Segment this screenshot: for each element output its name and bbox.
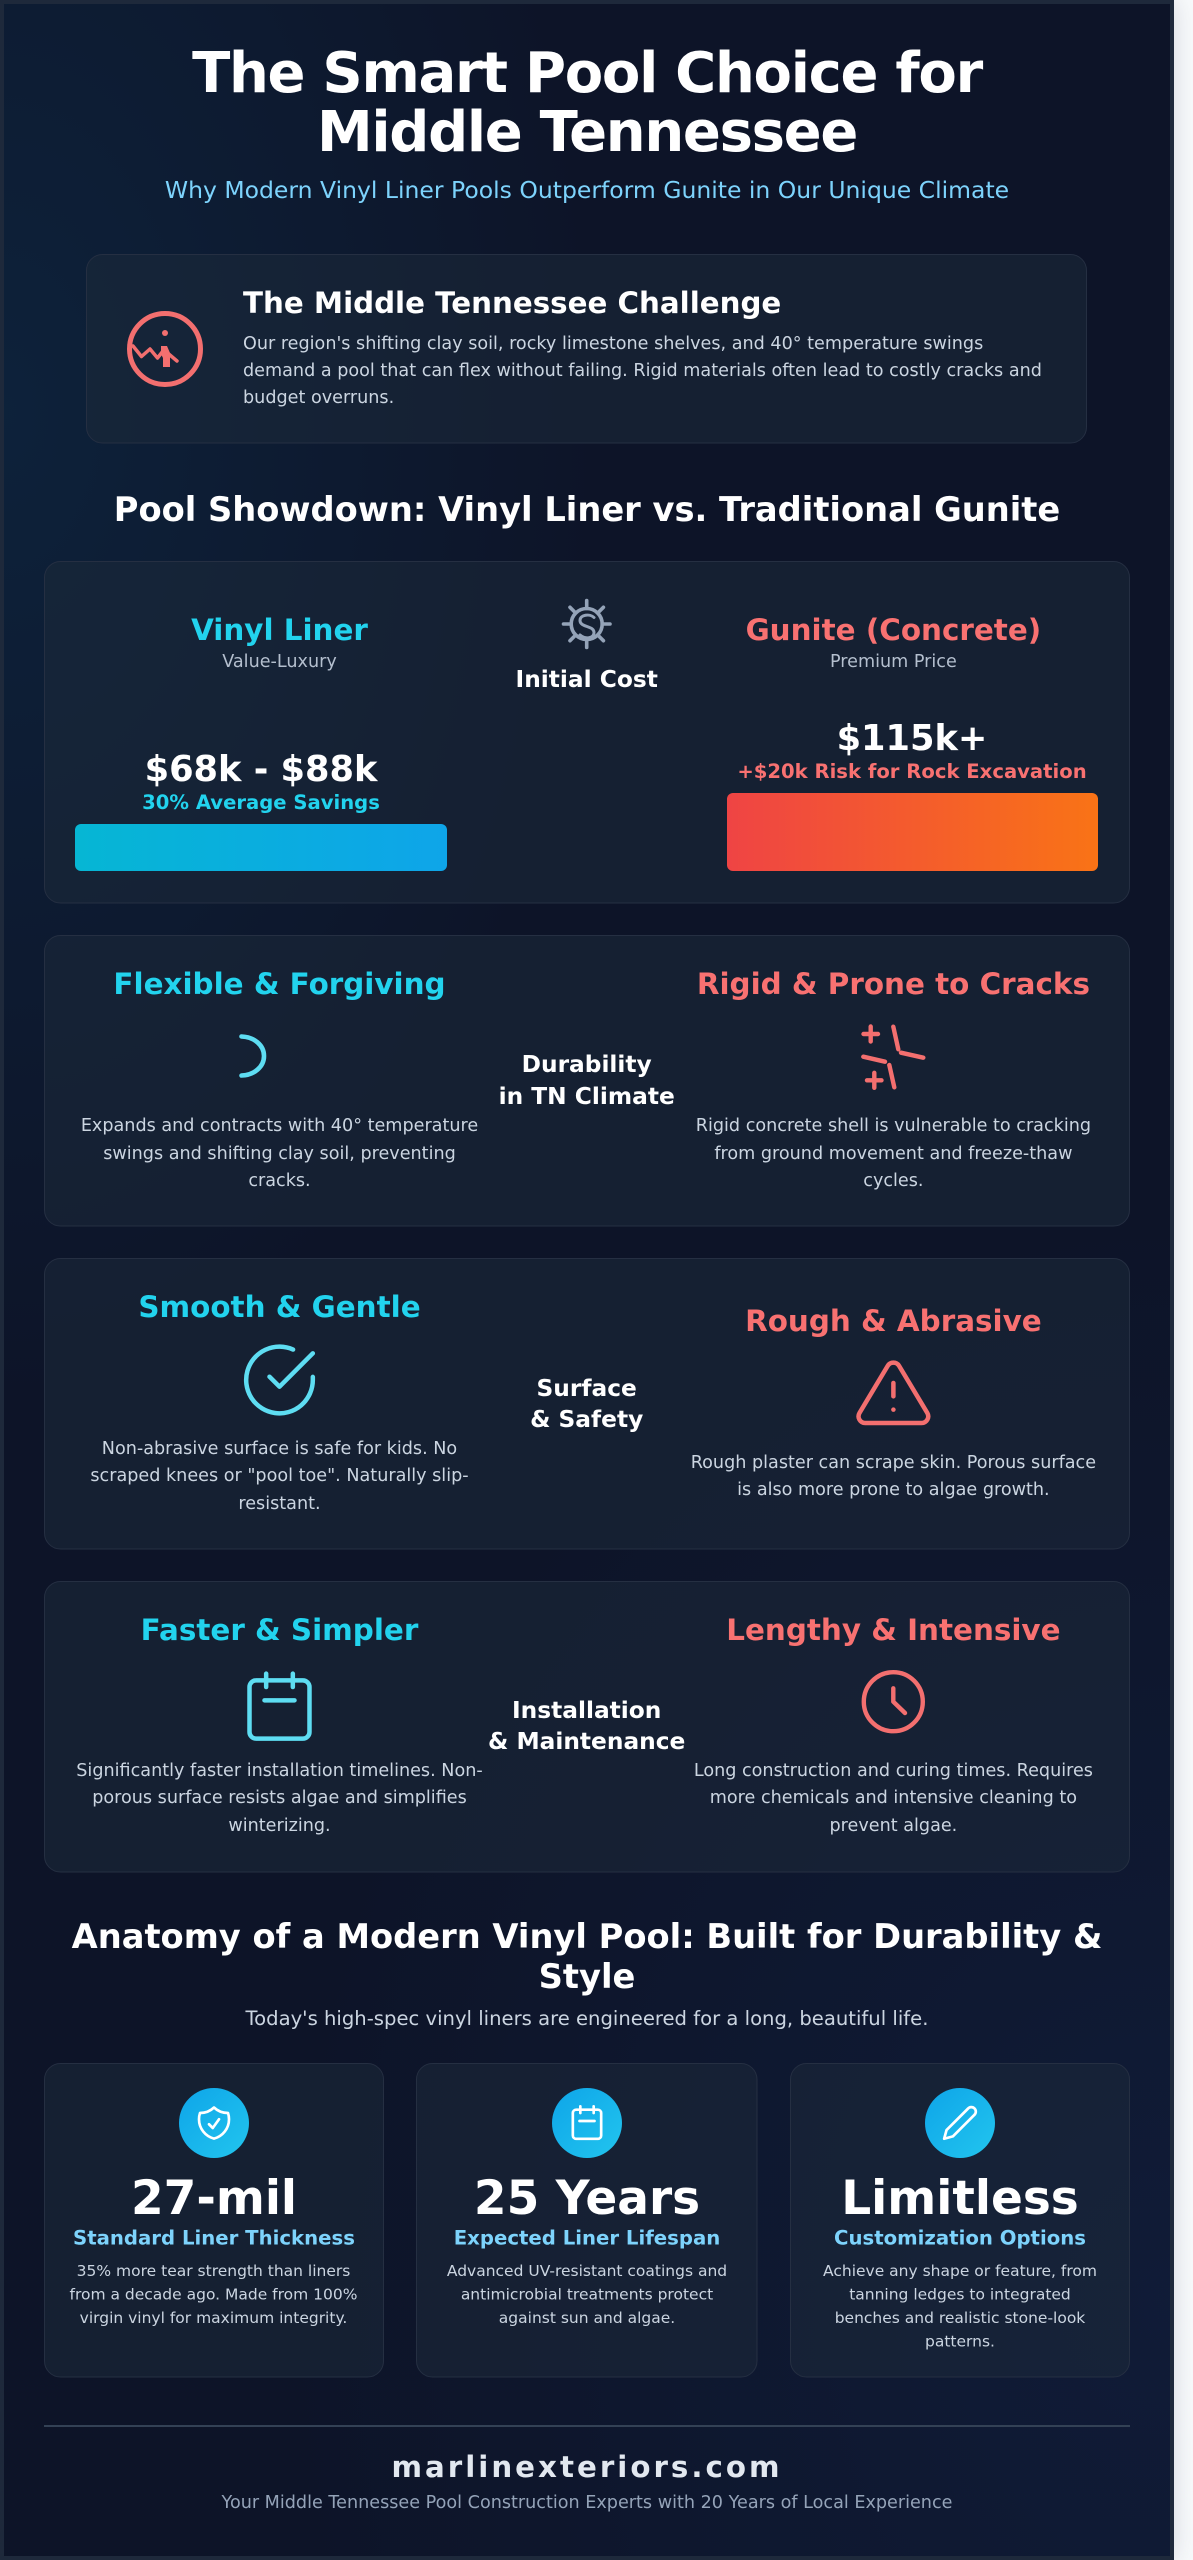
icon: calendar <box>249 1674 309 1739</box>
gunite: rigid and prone to cracks <box>696 967 1091 1191</box>
vinyl durability text: Expands and contracts with 40° temperature <box>81 1116 478 1136</box>
body text: Our region's shifting clay soil, rocky limestone shelves, and 40° temperature swings <box>243 334 983 354</box>
heading: anatomy of a modern vinyl pool <box>72 1917 1102 1996</box>
vinyl surface text: resistant. <box>238 1494 321 1514</box>
panel: the middle tennessee challenge <box>86 254 1086 443</box>
heading: The Middle Tennessee Challenge <box>243 286 781 320</box>
vinyl surface text <box>90 1439 469 1514</box>
center label: surface and safety: Surface <box>537 1375 637 1402</box>
vinyl: flexible and forgiving: Flexible & Forgiving <box>113 967 446 1001</box>
icon: shield <box>179 2088 249 2158</box>
vinyl installation text: porous surface resists algae and simplifies <box>92 1788 467 1808</box>
icon: cracks <box>863 1026 923 1088</box>
stat: 27-mil <box>131 2171 297 2226</box>
stat label: Customization Options <box>834 2226 1086 2250</box>
body text: demand a pool that can flex without failing. Rigid materials often lead to costly cracks and <box>243 361 1042 381</box>
vinyl installation text: Significantly faster installation timelines. Non- <box>76 1761 483 1781</box>
description <box>69 2262 358 2327</box>
gunite durability text: Rigid concrete shell is vulnerable to cracking <box>696 1116 1091 1136</box>
gunite price <box>737 718 1087 783</box>
title: The Smart Pool Choice for <box>192 41 984 106</box>
icon: pencil <box>925 2088 995 2158</box>
vinyl surface text: Non-abrasive surface is safe for kids. No <box>102 1439 457 1459</box>
stat: 25 Years <box>474 2171 700 2226</box>
gunite installation text: more chemicals and intensive cleaning to <box>710 1788 1077 1808</box>
bar: vinyl cost <box>75 824 447 871</box>
icon: check circle <box>246 1347 313 1413</box>
center label: installation and maintenance <box>488 1697 685 1755</box>
center label: installation and maintenance: Installation <box>512 1697 661 1724</box>
gunite: rough and abrasive <box>691 1304 1096 1500</box>
vinyl: faster and simpler <box>76 1613 483 1836</box>
gunite header: Gunite (Concrete) <box>746 613 1041 647</box>
vinyl installation text <box>76 1761 483 1836</box>
gunite durability text: cycles. <box>863 1171 924 1191</box>
vinyl liner header: Vinyl Liner <box>191 613 368 647</box>
gunite durability text: from ground movement and freeze-thaw <box>714 1144 1072 1164</box>
center label: durability: Durability <box>522 1051 652 1078</box>
vinyl price: $68k - $88k <box>145 749 379 790</box>
subtitle: Why Modern Vinyl Liner Pools Outperform Gunite in Our Unique Climate <box>165 176 1009 204</box>
vinyl durability text: swings and shifting clay soil, preventing <box>103 1144 456 1164</box>
gunite header <box>746 613 1041 672</box>
heading: anatomy of a modern vinyl pool: Style <box>539 1957 635 1996</box>
description: Achieve any shape or feature, from <box>823 2262 1097 2280</box>
description: benches and realistic stone-look <box>835 2309 1085 2327</box>
panel: durability comparison <box>44 936 1130 1226</box>
body text: budget overruns. <box>243 388 394 408</box>
gunite: rigid and prone to cracks: Rigid & Prone to Cracks <box>697 967 1090 1001</box>
gunite: rough and abrasive: Rough & Abrasive <box>745 1304 1042 1338</box>
center label: durability <box>499 1051 675 1110</box>
vinyl price <box>142 749 380 814</box>
description: tanning ledges to integrated <box>849 2286 1071 2304</box>
stat label: Standard Liner Thickness <box>73 2226 355 2250</box>
icon: clock <box>864 1672 923 1731</box>
gunite header: Premium Price <box>830 652 957 672</box>
card: liner thickness <box>44 2064 384 2377</box>
stat: Limitless <box>841 2171 1079 2226</box>
vinyl surface text: scraped knees or "pool toe". Naturally slip- <box>90 1466 469 1486</box>
description: patterns. <box>925 2332 995 2350</box>
description: virgin vinyl for maximum integrity. <box>80 2309 347 2327</box>
gunite installation text <box>694 1761 1093 1836</box>
footer: Your Middle Tennessee Pool Construction Experts with 20 Years of Local Experience <box>221 2493 952 2513</box>
vinyl: flexible and forgiving <box>81 967 478 1191</box>
bar: gunite cost <box>727 793 1098 871</box>
title: Middle Tennessee <box>317 100 857 165</box>
body text <box>243 334 1042 408</box>
stat label: Expected Liner Lifespan <box>454 2226 720 2250</box>
vinyl price: 30% Average Savings <box>142 791 380 814</box>
footer <box>221 2450 952 2513</box>
center label: surface and safety: & Safety <box>530 1406 643 1433</box>
icon: dollar wheel <box>564 600 610 648</box>
card: liner lifespan <box>416 2064 757 2377</box>
description <box>823 2262 1097 2350</box>
center label: surface and safety <box>530 1375 643 1433</box>
description <box>447 2262 727 2327</box>
footer: marlinexteriors.com <box>392 2450 782 2484</box>
gunite: lengthy and intensive: Lengthy & Intensive <box>726 1613 1061 1647</box>
vinyl durability text <box>81 1116 478 1191</box>
vinyl: faster and simpler: Faster & Simpler <box>141 1613 419 1647</box>
panel: surface and safety comparison <box>44 1258 1130 1549</box>
gunite surface text <box>691 1453 1096 1500</box>
panel: initial cost comparison <box>44 562 1130 903</box>
center label: initial cost: Initial Cost <box>516 666 658 693</box>
vinyl liner header: Value-Luxury <box>222 652 337 672</box>
vinyl: smooth and gentle: Smooth & Gentle <box>138 1290 421 1324</box>
heading: anatomy of a modern vinyl pool: Anatomy of a Modern Vinyl Pool: Built for Durability & <box>72 1917 1102 1956</box>
gunite: lengthy and intensive <box>694 1613 1093 1836</box>
vinyl liner header <box>191 613 368 672</box>
heading: pool showdown: Pool Showdown: Vinyl Liner vs. Traditional Gunite <box>114 490 1060 529</box>
vinyl installation text: winterizing. <box>228 1816 331 1836</box>
icon: flexible arc <box>242 1036 264 1076</box>
description: 35% more tear strength than liners <box>77 2262 350 2280</box>
anatomy subtitle: Today's high-spec vinyl liners are engineered for a long, beautiful life. <box>245 2007 928 2030</box>
center label: installation and maintenance: & Maintenance <box>488 1728 685 1755</box>
icon: warning triangle <box>859 1363 928 1423</box>
card: customization <box>790 2064 1130 2377</box>
gunite price: $115k+ <box>837 718 987 759</box>
vinyl durability text: cracks. <box>248 1171 311 1191</box>
icon: cracked ground warning <box>130 314 200 384</box>
description: antimicrobial treatments protect <box>461 2286 713 2304</box>
gunite surface text: is also more prone to algae growth. <box>737 1480 1050 1500</box>
vinyl: smooth and gentle <box>90 1290 469 1514</box>
gunite installation text: Long construction and curing times. Requires <box>694 1761 1093 1781</box>
gunite durability text <box>696 1116 1091 1191</box>
description: from a decade ago. Made from 100% <box>69 2286 358 2304</box>
center label: durability: in TN Climate <box>499 1083 675 1110</box>
gunite price: +$20k Risk for Rock Excavation <box>737 760 1087 783</box>
gunite surface text: Rough plaster can scrape skin. Porous surface <box>691 1453 1096 1473</box>
gunite installation text: prevent algae. <box>830 1816 957 1836</box>
description: Advanced UV-resistant coatings and <box>447 2262 727 2280</box>
title <box>192 41 984 165</box>
panel: installation and maintenance comparison <box>44 1582 1130 1872</box>
icon: calendar <box>552 2088 622 2158</box>
description: against sun and algae. <box>499 2309 675 2327</box>
